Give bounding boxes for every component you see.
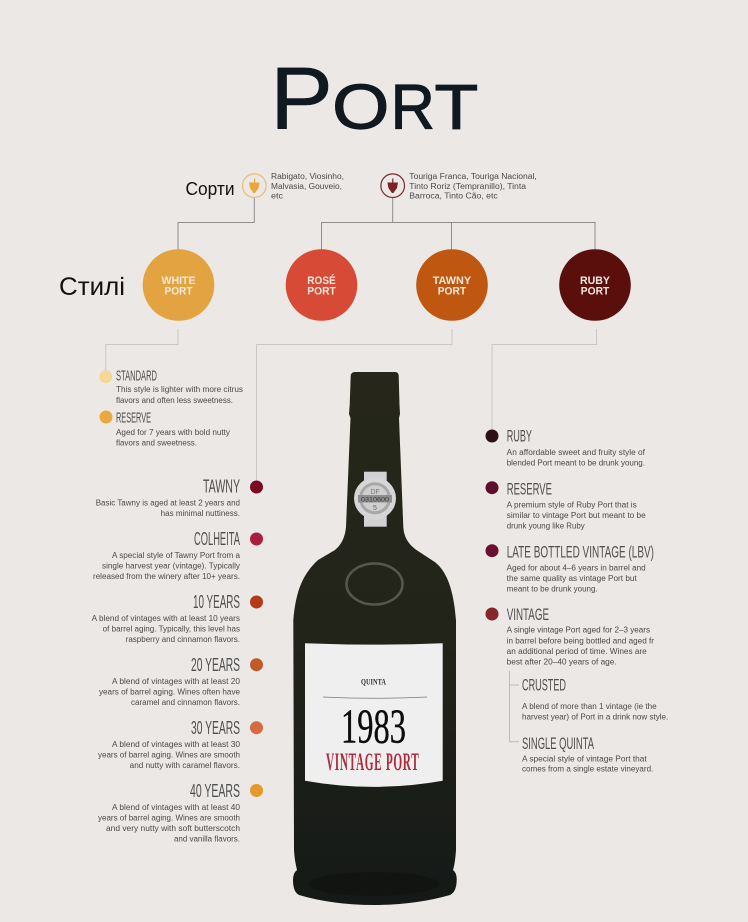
white port: reserve [100, 410, 230, 448]
bracket: vintage substyles [510, 671, 519, 742]
tawny: colheita: single harvest year (vintage). Typically [102, 562, 240, 571]
tawny: 30 years: 30 YEARS [191, 717, 240, 738]
tawny: 40 years: years of barrel aging. Wines are smooth [98, 814, 240, 823]
shoulder ring [346, 564, 402, 604]
ruby: vintage [486, 605, 654, 666]
tawny: colheita: released from the winery after 10+ years. [93, 572, 240, 581]
seal: 5 [373, 505, 377, 512]
tawny: 40 years [98, 780, 263, 844]
ruby: reserve: RESERVE [507, 479, 552, 498]
tawny: colheita [93, 528, 263, 581]
text: white grape varieties [271, 172, 344, 200]
text: white grape varieties: Rabigato, Viosinho, [271, 172, 344, 181]
label [305, 643, 443, 787]
tawny: 30 years: and nutty with caramel flavors. [130, 761, 240, 770]
ruby: vintage: A single vintage Port aged for 2–3 years [507, 626, 650, 635]
tawny: 20 years: years of barrel aging. Wines often have [99, 688, 241, 697]
tawny: 20 years: caramel and cinnamon flavors. [131, 698, 240, 707]
tawny: basic: has minimal nuttiness. [161, 509, 240, 518]
tawny: 30 years: years of barrel aging. Wines are smooth [98, 751, 240, 760]
vintage: single quinta [522, 734, 653, 774]
title: R [391, 72, 435, 142]
title: P [270, 48, 333, 147]
label: 1983 [341, 698, 406, 753]
tawny: basic: TAWNY [203, 476, 240, 497]
vintage: crusted: A blend of more than 1 vintage (ie the [522, 702, 657, 711]
tawny: 20 years: 20 YEARS [191, 654, 240, 675]
icon: red grape [381, 174, 405, 198]
vintage: single quinta: A special style of vintage Port that [522, 754, 647, 763]
tawny: 40 years: and vanilla flavors. [174, 835, 240, 844]
tawny: basic: Basic Tawny is aged at least 2 years and [96, 499, 240, 508]
text: red grape varieties: Tinto Roriz (Tempranillo), Tinta [409, 182, 527, 191]
tawny: 10 years: of barrel aging. Typically, this level has [103, 625, 240, 634]
circle: rosé port [286, 249, 357, 321]
text: white grape varieties: etc [271, 192, 283, 200]
ruby: late bottled vintage: the same quality as vintage Port but [507, 574, 637, 583]
ruby: vintage: best after 20–40 years of age. [507, 657, 617, 666]
ruby: basic [486, 427, 646, 467]
ruby: basic: blended Port meant to be drunk young. [507, 458, 645, 467]
connector lines: grapes to styles [178, 198, 595, 250]
title [270, 48, 478, 147]
tawny: 10 years: raspberry and cinnamon flavors. [126, 635, 240, 644]
tawny: 10 years [92, 591, 263, 644]
bottle base shadow [309, 872, 439, 896]
tawny: 40 years: A blend of vintages with at least 40 [112, 803, 241, 812]
label: QUINTA [361, 677, 386, 686]
circle: tawny port: PORT [438, 286, 466, 298]
ruby: late bottled vintage: meant to be drunk young. [507, 584, 598, 593]
label: Сорти: Сорти [186, 179, 234, 199]
text: red grape varieties: Touriga Franca, Touriga Nacional, [409, 172, 537, 181]
title: O [332, 72, 389, 142]
circle: white port [143, 249, 214, 321]
tawny: 40 years: 40 YEARS [190, 780, 240, 801]
circle: white port: WHITE [162, 275, 196, 287]
circle: rosé port: PORT [307, 286, 336, 298]
tawny: 20 years: A blend of vintages with at least 20 [112, 677, 241, 686]
vintage: crusted [522, 676, 668, 721]
label: VINTAGE PORT [326, 749, 420, 776]
ruby: basic: An affordable sweet and fruity style of [507, 448, 646, 457]
ruby: basic: RUBY [507, 427, 532, 446]
tawny: 30 years: A blend of vintages with at least 30 [112, 740, 241, 749]
connector lines: styles to lists [106, 329, 596, 481]
bottle silhouette [293, 372, 457, 905]
tawny: 20 years [99, 654, 263, 707]
ruby: reserve [486, 479, 646, 531]
ruby: vintage: an additional period of time. Wines are [507, 647, 647, 656]
tawny: basic [96, 476, 263, 518]
tawny: 10 years: 10 YEARS [193, 591, 240, 612]
ruby: late bottled vintage [486, 542, 654, 593]
seal: DF [370, 489, 380, 496]
ruby: late bottled vintage: Aged for about 4–6 years in barrel and [507, 563, 646, 572]
tawny: 30 years [98, 717, 263, 770]
label: Стилі: Стилі [59, 273, 125, 301]
circle: ruby port: PORT [581, 286, 609, 298]
text: red grape varieties: Barroca, Tinto Cão, etc [409, 192, 498, 200]
white port: reserve: RESERVE [116, 410, 151, 427]
ruby: reserve: similar to vintage Port but meant to be [507, 511, 646, 520]
tawny: 10 years: A blend of vintages with at least 10 years [92, 614, 240, 623]
white port: standard [99, 368, 243, 405]
vintage: crusted: harvest year) of Port in a drink now style. [522, 712, 668, 721]
ruby: vintage: VINTAGE [507, 605, 549, 624]
circle: tawny port [416, 249, 488, 321]
ruby: reserve: drunk young like Ruby [507, 522, 585, 531]
circle: rosé port: ROSÉ [307, 274, 336, 287]
circle: tawny port: TAWNY [433, 275, 472, 287]
tawny: colheita: COLHEITA [194, 528, 240, 549]
ruby: reserve: A premium style of Ruby Port that is [507, 500, 637, 509]
icon: white grape [242, 174, 266, 198]
tawny: colheita: A special style of Tawny Port from a [112, 551, 241, 560]
circle: ruby port: RUBY [580, 275, 611, 287]
ruby: vintage: in barrel before being bottled and aged fr [507, 636, 654, 645]
white port: reserve: flavors and sweetness. [116, 438, 197, 448]
white port: standard: flavors and often less sweetness. [116, 396, 233, 405]
white port: standard: This style is lighter with more citrus [116, 385, 243, 394]
white port: standard: STANDARD [116, 368, 157, 385]
text: white grape varieties: Malvasia, Gouveio, [271, 182, 342, 191]
text: red grape varieties [409, 172, 537, 200]
tawny: 40 years: and very nutty with soft butterscotch [106, 824, 240, 833]
white port: reserve: Aged for 7 years with bold nutty [116, 428, 230, 437]
seal [354, 472, 396, 527]
circle: white port: PORT [164, 286, 193, 298]
title: T [435, 72, 478, 142]
vintage: single quinta: comes from a single estate vineyard. [522, 765, 653, 774]
seal: 0310600 [361, 496, 389, 504]
vintage: single quinta: SINGLE QUINTA [522, 734, 594, 753]
vintage: crusted: CRUSTED [522, 676, 566, 695]
circle: ruby port [559, 249, 631, 321]
bottle [293, 372, 457, 905]
